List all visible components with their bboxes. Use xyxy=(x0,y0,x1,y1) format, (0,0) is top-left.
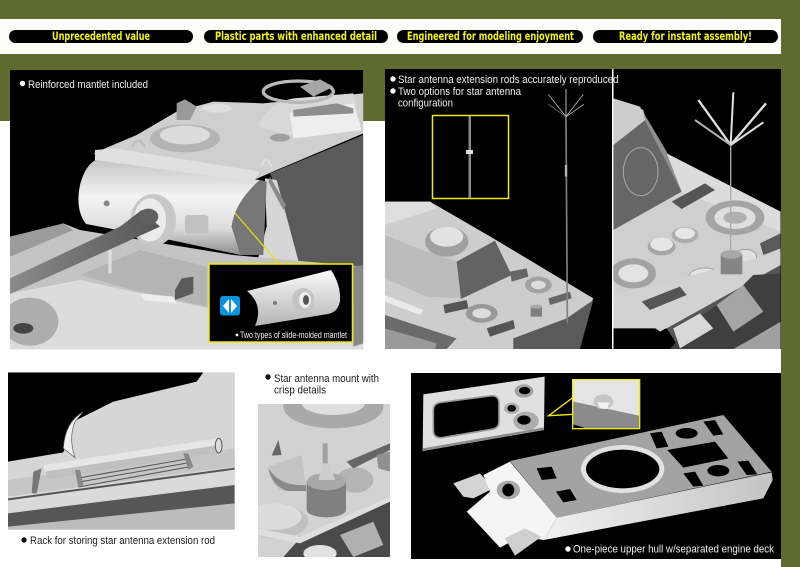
caption: reinforced mantlet: Reinforced mantlet included xyxy=(28,79,148,91)
caption: two types: Two types of slide-molded mantlet xyxy=(240,330,347,341)
illustration: close-up of engine deck xyxy=(611,98,781,349)
callout line xyxy=(235,213,279,264)
caption: star antenna rods: Star antenna extension rods accurately reproduced xyxy=(398,74,618,86)
caption: rack: Rack for storing star antenna extension rod xyxy=(30,535,215,547)
pill: engineered: Engineered for modeling enjoyment xyxy=(407,29,574,43)
panel: antenna mount image xyxy=(258,404,390,557)
antenna rod: left xyxy=(548,89,584,323)
illustration: hull and engine deck xyxy=(423,377,773,556)
panel: reinforced mantlet xyxy=(2,70,363,349)
caption: two options xyxy=(390,86,522,110)
inset: antenna joint detail xyxy=(432,116,508,198)
hull xyxy=(453,415,773,556)
olive right strip xyxy=(781,0,800,567)
panel: rack image xyxy=(8,372,235,530)
inset: slide-molded mantlet xyxy=(209,264,352,342)
olive top area xyxy=(0,0,800,121)
icon: slide-mold arrows xyxy=(220,296,240,316)
panel: upper hull xyxy=(411,373,781,559)
engine deck plate xyxy=(423,377,545,451)
caption: antenna mount: crisp details xyxy=(274,384,326,396)
header pills xyxy=(9,29,778,43)
antenna rod: right xyxy=(695,92,766,252)
mantlet part xyxy=(247,270,340,326)
inset: bolt detail xyxy=(573,380,640,429)
caption: two options: Two options for star antenna xyxy=(398,86,522,98)
callout pointer xyxy=(549,398,573,416)
pill: plastic parts: Plastic parts with enhanced detail xyxy=(215,29,377,43)
pill: unprecedented value: Unprecedented value xyxy=(52,29,150,43)
pill: ready: Ready for instant assembly! xyxy=(619,29,752,43)
header white band xyxy=(0,19,781,54)
panel: star antenna xyxy=(385,69,781,350)
illustration: tank rear with long antenna xyxy=(385,202,593,349)
white divider xyxy=(612,69,614,350)
caption: antenna mount: Star antenna mount with xyxy=(274,373,379,385)
caption: antenna mount xyxy=(265,373,379,396)
caption: two options: configuration xyxy=(398,98,453,110)
illustration: turret and mantlet xyxy=(2,79,363,349)
caption: one-piece hull: One-piece upper hull w/separated engine deck xyxy=(573,544,774,556)
